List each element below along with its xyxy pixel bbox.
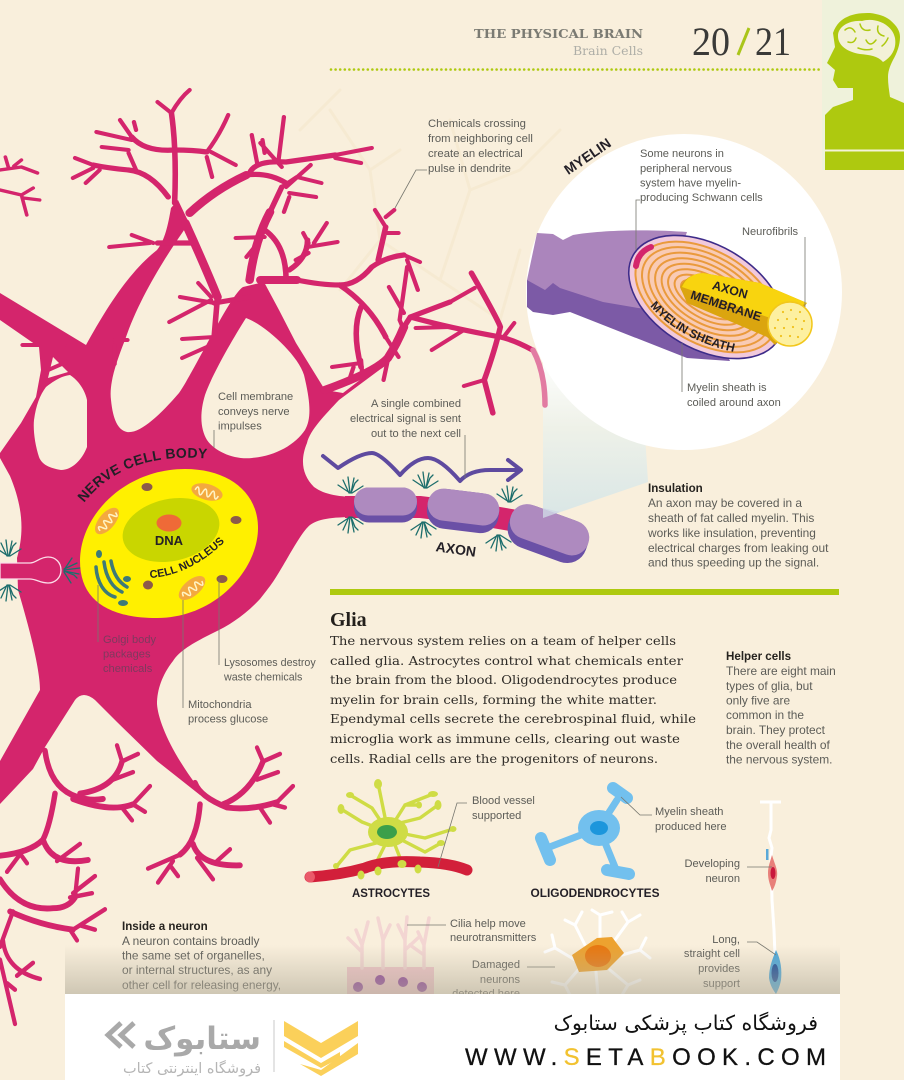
page number — [692, 19, 791, 64]
golgi body — [96, 550, 131, 606]
callout: dendrite chemicals: pulse in dendrite — [428, 163, 511, 175]
astrocyte cell — [336, 783, 453, 867]
callout: myelin sheath produced: produced here — [655, 821, 727, 833]
insulation text block: works like insulation, preventing — [647, 526, 816, 540]
callout: dendrite chemicals — [395, 118, 533, 208]
nerve cell body label: NERVE CELL BODY — [77, 448, 208, 502]
pink axon continuation — [533, 350, 545, 405]
left axon stub with nerve endings — [0, 540, 80, 601]
store name: فروشگاه کتاب پزشکی ستابوک — [554, 1011, 818, 1035]
myelin segment 1 — [354, 488, 417, 522]
callout: long straight cell: straight cell — [684, 948, 740, 960]
glia body text — [330, 634, 696, 766]
glia body text: the brain from the blood. Oligodendrocytes produce — [330, 673, 677, 687]
blood vessel — [310, 862, 467, 877]
axon with myelin segments — [338, 472, 594, 569]
helper cells text block: the nervous system. — [726, 752, 832, 766]
oligodendrocyte diagram — [530, 788, 660, 900]
glia body text: called glia. Astrocytes control what chemicals enter — [330, 654, 683, 668]
golgi label: Golgi body — [103, 634, 156, 646]
logo chevrons — [284, 1021, 358, 1076]
myelin callouts: Neurofibrils — [742, 226, 799, 238]
membrane label: MEMBRANE — [689, 288, 763, 324]
axon cylinder — [680, 273, 812, 346]
neuron illustration — [0, 90, 532, 1024]
myelin callouts: Some neurons in — [640, 148, 724, 160]
callout: developing neuron — [684, 858, 772, 885]
myelin callouts — [636, 148, 805, 409]
helper cells text block: the overall health of — [726, 738, 830, 752]
lysosomes label: Lysosomes destroy — [224, 657, 316, 669]
callout: blood vessel: Blood vessel — [472, 795, 535, 807]
callout: blood vessel — [438, 795, 535, 867]
callout: combined signal — [350, 398, 465, 478]
callout: combined signal: out to the next cell — [371, 428, 461, 440]
callout: blood vessel: supported — [472, 810, 521, 822]
lysosomes label: waste chemicals — [223, 672, 302, 684]
schwann cell — [636, 247, 651, 266]
lysosomes — [142, 483, 242, 590]
DNA label: DNA — [155, 533, 184, 548]
ependymal cilia diagram — [347, 917, 434, 997]
glia divider bar — [330, 589, 839, 595]
callout: dendrite chemicals: create an electrical — [428, 148, 523, 160]
logo arrows — [108, 1023, 134, 1047]
callout: damaged neurons: neurons — [480, 974, 520, 986]
lower dendrites — [0, 745, 293, 1024]
myelin callouts: system have myelin- — [640, 178, 741, 190]
microglia diagram — [545, 910, 650, 995]
myelin callouts: producing Schwann cells — [640, 192, 763, 204]
myelin heading: MYELIN — [561, 135, 614, 178]
nucleolus — [156, 514, 182, 532]
astrocyte diagram — [305, 779, 467, 900]
mitochondrion — [189, 480, 225, 504]
cell nucleus label: CELL NUCLEUS — [150, 538, 224, 578]
insulation text block: An axon may be covered in a — [648, 496, 802, 510]
inside a neuron text block: A neuron contains broadly — [122, 934, 260, 948]
helper cells text block: only five are — [726, 694, 790, 708]
callout: myelin sheath produced — [621, 797, 727, 833]
callout: combined signal: A single combined — [371, 398, 461, 410]
panel: head silhouette tab — [822, 0, 904, 170]
callout: myelin sheath produced: Myelin sheath — [655, 806, 723, 818]
astrocytes label: ASTROCYTES — [352, 886, 430, 900]
axon label in myelin: AXON — [711, 278, 749, 302]
bottom fade overlay — [65, 945, 840, 994]
light myelin body — [527, 230, 687, 310]
glia body text: The nervous system relies on a team of helper cells — [330, 634, 676, 648]
developing neuron — [766, 849, 777, 891]
callout: cell membrane: impulses — [218, 420, 262, 432]
mitochondria label: process glucose — [188, 714, 268, 726]
mitochondria label: Mitochondria — [188, 699, 252, 711]
logo wordmark: ستابوک — [143, 1021, 261, 1057]
myelin callouts: coiled around axon — [687, 397, 781, 409]
glia body text: Ependymal cells secrete the cerebrospinal fluid, while — [330, 712, 696, 726]
callout: damaged neurons — [452, 959, 555, 1000]
pale zoom wedge — [543, 355, 648, 518]
upper dendrites — [0, 90, 532, 413]
radial cell diagram — [760, 802, 781, 994]
callout: long straight cell: support — [703, 978, 740, 990]
page number: 20 — [692, 19, 730, 64]
page header: Brain Cells — [573, 44, 643, 58]
helper cells text block: common in the — [726, 708, 804, 722]
cell nucleus body — [80, 469, 258, 618]
page number: 21 — [755, 19, 791, 64]
myelin sheath label: MYELIN SHEATH — [650, 300, 735, 352]
sheath cross-section — [607, 210, 805, 384]
insulation text block: electrical charges from leaking out — [648, 541, 829, 555]
glia heading: Glia — [330, 609, 367, 631]
insulation text block: and thus speeding up the signal. — [648, 556, 819, 570]
oligodendrocytes label: OLIGODENDROCYTES — [530, 886, 660, 900]
myelin callouts: Myelin sheath is — [687, 382, 767, 394]
axon label: AXON — [435, 538, 477, 560]
callout: long straight cell — [684, 934, 776, 990]
inside a neuron text block: Inside a neuron — [122, 920, 208, 933]
myelin callouts: peripheral nervous — [640, 163, 732, 175]
callout: cilia — [407, 918, 537, 944]
callout: cell membrane — [214, 391, 293, 448]
insulation text block: Insulation — [648, 482, 703, 495]
golgi label: packages — [103, 648, 151, 660]
callout: cell membrane: Cell membrane — [218, 391, 293, 403]
dark myelin body — [527, 270, 730, 361]
organelle callouts — [98, 578, 316, 726]
callout: long straight cell: Long, — [712, 934, 740, 946]
callout: developing neuron: neuron — [705, 873, 740, 885]
inside a neuron text block: the same set of organelles, — [122, 948, 265, 962]
callout: dendrite chemicals: from neighboring cell — [428, 133, 533, 145]
signal arrow — [323, 453, 521, 481]
inside a neuron text block: other cell for releasing energy, — [122, 978, 281, 992]
nerve endings — [338, 472, 522, 551]
callout: long straight cell: provides — [698, 963, 740, 975]
mitochondrion — [175, 572, 209, 604]
insulation text block: sheath of fat called myelin. This — [648, 511, 814, 525]
callout: cilia: neurotransmitters — [450, 932, 537, 944]
golgi label: chemicals — [103, 663, 153, 675]
myelin circle — [526, 134, 842, 450]
inside a neuron text block: or internal structures, as any — [122, 963, 272, 977]
callout: damaged neurons: detected here — [452, 988, 520, 1000]
helper cells text block: brain. They protect — [726, 723, 826, 737]
callout: cilia: Cilia help move — [450, 918, 526, 930]
helper cells text block: Helper cells — [726, 650, 791, 663]
myelin segment 2 — [425, 487, 501, 535]
callout: cell membrane: conveys nerve — [218, 406, 290, 418]
page header: THE PHYSICAL BRAIN — [474, 26, 643, 41]
callout: combined signal: electrical signal is sent — [350, 413, 461, 425]
myelin segment 3 — [502, 499, 594, 569]
callout: developing neuron: Developing — [684, 858, 740, 870]
faint background neuron watermark — [300, 90, 560, 320]
glia body text: myelin for brain cells, forming the white matter. — [330, 693, 657, 707]
mitochondrion — [91, 504, 123, 538]
helper cells text block: types of glia, but — [726, 679, 813, 693]
helper cells text block: There are eight main — [726, 664, 836, 678]
footer banner — [65, 994, 840, 1080]
page header — [474, 26, 643, 58]
cell body and main trunks — [0, 200, 386, 804]
callout: damaged neurons: Damaged — [472, 959, 520, 971]
glia body text: cells. Radial cells are the progenitors of neurons. — [330, 752, 658, 766]
store url: WWW. S ETA B OOK.COM — [465, 1044, 826, 1071]
radial cell body — [769, 950, 781, 994]
glia body text: microglia work as immune cells, clearing out waste — [330, 732, 680, 746]
logo subtitle: فروشگاه اینترنتی کتاب — [123, 1060, 261, 1077]
dendrite fragment of neighbouring cell — [0, 157, 40, 215]
callout: dendrite chemicals: Chemicals crossing — [428, 118, 526, 130]
